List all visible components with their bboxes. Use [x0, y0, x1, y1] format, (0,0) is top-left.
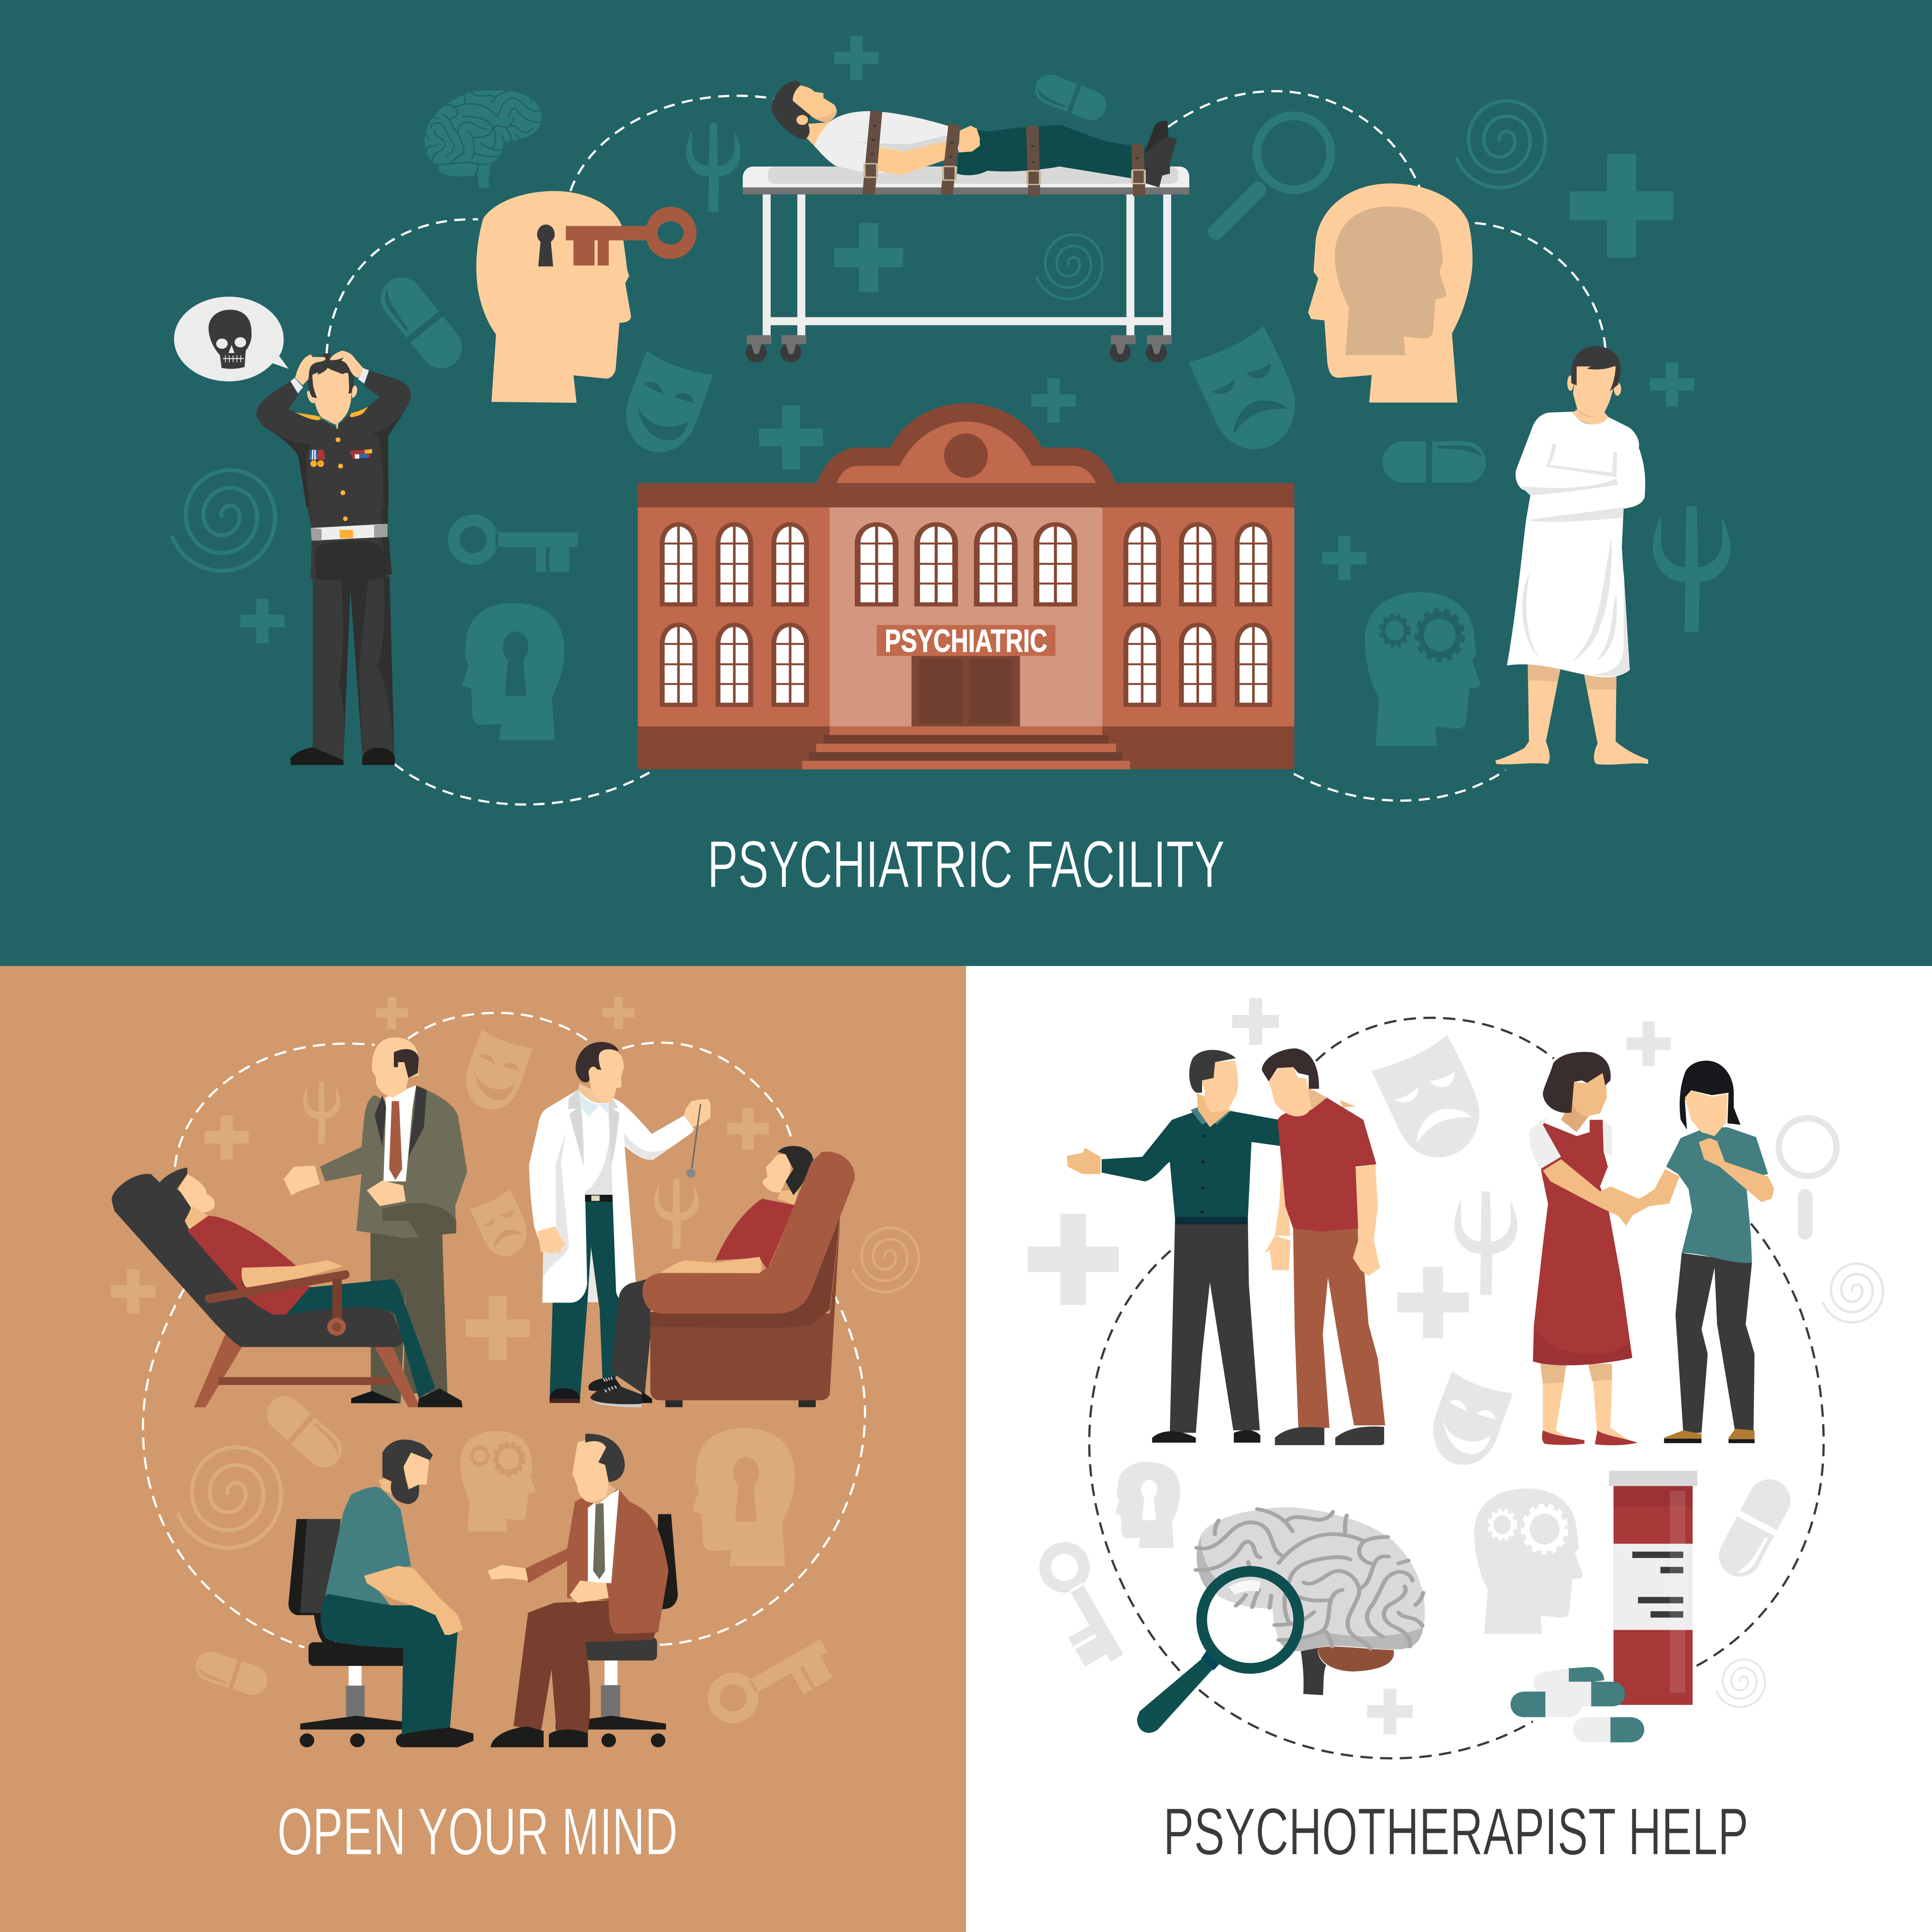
- speech bubble with skull and soldier: [174, 297, 411, 765]
- seated man's leg: [611, 1278, 650, 1394]
- man in olive suit: [283, 1037, 467, 1403]
- panel: psychiatric facility: [0, 0, 1932, 966]
- cerebrum: [1197, 1507, 1425, 1651]
- woman in teal shirt: [1626, 1061, 1774, 1443]
- wheels: [746, 335, 1172, 362]
- background icons: teal symbols: [157, 36, 1730, 746]
- figures: therapy scenes: [112, 1037, 855, 1747]
- panel: open your mind: [0, 966, 966, 1932]
- reclining chair with patient: [112, 1168, 462, 1407]
- cerebellum: [1318, 1646, 1394, 1671]
- panel background teal: [0, 0, 1932, 966]
- straps and buckles: [863, 110, 1145, 196]
- stretcher frame: [762, 192, 1171, 336]
- soldier trousers and shoes: [291, 502, 395, 765]
- icon: skull: [209, 310, 252, 369]
- lens highlight: [1228, 1580, 1261, 1595]
- man in red shirt: [1262, 1048, 1385, 1445]
- speech bubble: [174, 297, 289, 381]
- figures and objects: [1067, 1048, 1774, 1742]
- man in brown suit on office chair: [487, 1434, 678, 1747]
- woman in red dress: [1529, 1052, 1652, 1445]
- dome: [817, 403, 1115, 483]
- background icons: tan symbols: [111, 997, 928, 1738]
- background icons: gray symbols: [1024, 998, 1892, 1735]
- walls: [638, 507, 1294, 727]
- windows: [660, 522, 1272, 707]
- icon: head with key: [476, 191, 696, 403]
- panel background tan: [0, 966, 966, 1932]
- roof band: [638, 483, 1294, 507]
- medicine bottle: [1609, 1471, 1697, 1705]
- man in teal shirt: [1067, 1050, 1280, 1443]
- sign: PSYCHIATRIC: [885, 623, 1047, 659]
- capsules: [1510, 1667, 1644, 1742]
- title: open your mind: OPEN YOUR MIND: [277, 1794, 677, 1868]
- key: [566, 207, 696, 265]
- patient in white gown: [1495, 346, 1648, 765]
- doctor with pendulum: [529, 1042, 711, 1403]
- panel: psychotherapist help: [966, 966, 1932, 1932]
- title: psychiatric facility: PSYCHIATRIC FACILITY: [707, 827, 1225, 901]
- panel background white: [966, 966, 1932, 1932]
- dashed connector lines: [1089, 1018, 1824, 1758]
- door: [911, 656, 1020, 726]
- brain under magnifier: [1137, 1507, 1425, 1733]
- bearded man on office chair: [289, 1440, 474, 1747]
- seated patient's sneakers: [589, 1376, 652, 1407]
- keyhole: [537, 225, 555, 267]
- icon: brain silhouette: [425, 90, 541, 188]
- icon: bald head silhouette with inner head: [1308, 183, 1473, 403]
- brain stem: [1301, 1648, 1326, 1695]
- soldier upper body: [256, 348, 411, 507]
- psychiatric hospital building: [638, 403, 1294, 769]
- base and steps: [638, 726, 1294, 769]
- armchair with patient: [643, 1146, 855, 1407]
- patient strapped on stretcher: [743, 81, 1189, 362]
- brain folds: [1196, 1509, 1423, 1649]
- magnifier: [1137, 1571, 1299, 1733]
- man lying: [771, 81, 1177, 188]
- dashed connector lines: [327, 91, 1606, 805]
- dashed connector lines: [143, 1013, 865, 1647]
- mattress: [743, 167, 1189, 188]
